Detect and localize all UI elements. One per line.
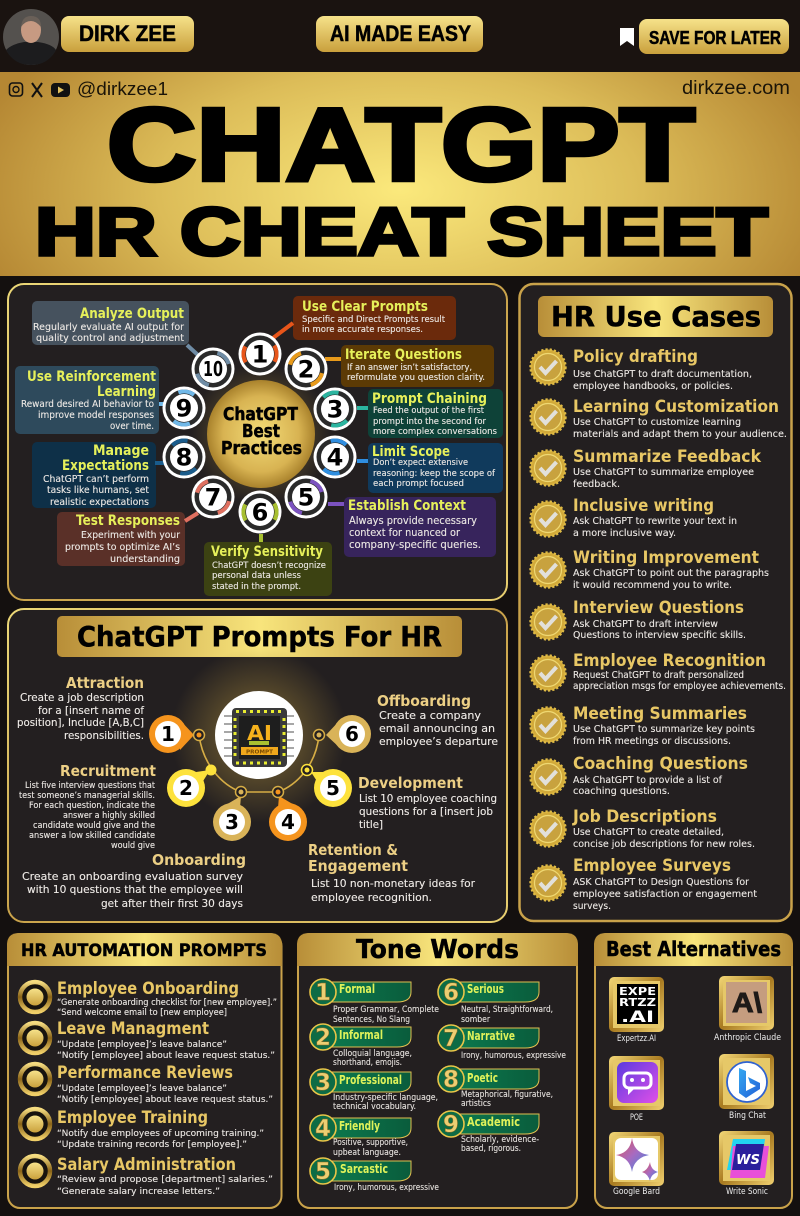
- item: leave managment: [20, 1019, 275, 1061]
- item: employee surveys: surveys.: [573, 901, 611, 912]
- item: learning customization: Use ChatGPT to customize learning: [573, 417, 741, 428]
- logo: anthropic claude: [714, 976, 781, 1043]
- item: inclusive writing: a more inclusive way.: [573, 528, 676, 539]
- social handle: @dirkzee1: [77, 79, 168, 99]
- card 6: verify sensitivity: Verify Sensitivity: [211, 544, 323, 560]
- node 9: 9: [176, 394, 192, 422]
- item: inclusive writing: Ask ChatGPT to rewrite your text in: [573, 516, 737, 527]
- item: employee training: [20, 1108, 264, 1150]
- item: learning customization: materials and adapt them to your audience.: [573, 429, 787, 440]
- panel: best alternatives: [594, 933, 793, 1208]
- header bar: [0, 0, 800, 72]
- attraction text: for a [insert name of: [38, 704, 145, 717]
- onboarding text: Create an onboarding evaluation survey: [22, 870, 243, 883]
- card 2: iterate questions: Iterate Questions: [345, 347, 462, 363]
- panel: hr automation prompts: [7, 933, 282, 1208]
- node 2: 2: [298, 356, 314, 384]
- logo: poe: POE: [630, 1113, 643, 1123]
- recruitment text: candidate would give and the: [33, 821, 155, 831]
- item: job descriptions: Job Descriptions: [572, 807, 717, 827]
- node 2: [284, 348, 328, 390]
- card 4: limit scope: [368, 443, 503, 493]
- tone 4 friendly: 4: [315, 1116, 331, 1142]
- heading: HR Use Cases: [551, 300, 761, 333]
- card 5: establish context: context for nuanced or: [349, 527, 461, 539]
- card 9: use reinforcement learning: [15, 366, 159, 434]
- heading: [297, 933, 578, 966]
- node 5: [284, 476, 328, 518]
- card 2: iterate questions: If an answer isn’t satisfactory,: [347, 363, 472, 373]
- attraction text: Attraction: [66, 674, 144, 692]
- item: interview questions: Questions to interview specific skills.: [573, 630, 746, 641]
- badge 2: [167, 764, 216, 807]
- tone 5 sarcastic: 5: [315, 1159, 331, 1185]
- card 3: prompt chaining: Feed the output of the first: [373, 406, 484, 416]
- item: employee training: Employee Training: [57, 1108, 208, 1128]
- item: learning customization: [530, 397, 787, 440]
- title banner: [0, 72, 800, 276]
- heading: HR AUTOMATION PROMPTS: [21, 941, 267, 961]
- logo: expertzz: .AI: [621, 1007, 654, 1026]
- item: employee onboarding: [20, 979, 277, 1018]
- offboarding text: employee’s departure: [379, 735, 498, 748]
- logo: bing chat: Bing Chat: [729, 1111, 767, 1121]
- item: performance reviews: “Update [employee]’s leave balance”: [57, 1084, 227, 1094]
- card 9: use reinforcement learning: Use Reinforcement: [27, 369, 156, 385]
- item: summarize feedback: Use ChatGPT to summarize employee: [573, 467, 754, 478]
- connector lines: [155, 323, 368, 542]
- attraction text: position], Include [A,B,C]: [17, 716, 144, 729]
- tone 6 serious: Serious: [467, 982, 504, 996]
- item: policy drafting: employee handbooks, or policies.: [573, 381, 733, 392]
- item: summarize feedback: [530, 447, 762, 490]
- main title: CHATGPT: [107, 87, 695, 202]
- logo: write sonic: Write Sonic: [726, 1187, 768, 1197]
- retention text: employee recognition.: [311, 891, 432, 904]
- item: job descriptions: [530, 807, 755, 850]
- hub: chatgpt best practices: Best: [242, 422, 280, 442]
- item: employee onboarding: “Send welcome email to [new employee]: [57, 1008, 227, 1018]
- item: employee onboarding: Employee Onboarding: [57, 979, 239, 999]
- card 8: manage expectations: tasks like humans, set: [47, 485, 149, 496]
- tagline button: [316, 16, 483, 52]
- hub halo: [191, 364, 331, 504]
- tone 4 friendly: upbeat language.: [333, 1148, 401, 1158]
- node 3: 3: [327, 396, 343, 424]
- subtitle: HR CHEAT SHEET: [35, 194, 768, 270]
- attraction text: responsibilities.: [64, 729, 144, 742]
- logo: expertzz: RTZZ: [619, 996, 656, 1009]
- logo: poe: [609, 1056, 664, 1123]
- item: writing improvement: Ask ChatGPT to point out the paragraphs: [573, 568, 769, 579]
- hub: chatgpt best practices: [207, 380, 315, 488]
- hub: chatgpt best practices: Practices: [221, 439, 302, 459]
- card 7: test responses: [57, 512, 185, 566]
- node 1: [238, 332, 282, 376]
- logo: expertzz: [609, 977, 664, 1044]
- badge 1: [149, 715, 204, 753]
- tone 6 serious: Neutral, Straightforward,: [461, 1005, 553, 1015]
- card 9: use reinforcement learning: over time.: [110, 421, 154, 432]
- recruitment text: [19, 762, 157, 851]
- item: meeting summaries: Meeting Summaries: [573, 704, 747, 724]
- item: performance reviews: “Notify [employee] about leave request status.”: [57, 1095, 273, 1105]
- item: leave managment: Leave Managment: [57, 1019, 209, 1039]
- card 10: analyze output: [32, 301, 189, 345]
- item: salary administration: “Generate salary increase letters.”: [57, 1187, 220, 1197]
- retention text: List 10 non-monetary ideas for: [311, 877, 475, 890]
- tone 7 narrative: Irony, humorous, expressive: [461, 1051, 566, 1061]
- item: employee recognition: Request ChatGPT to draft personalized: [573, 670, 744, 681]
- tone 1 formal: Sentences, No Slang: [333, 1015, 410, 1025]
- tone 8 poetic: [438, 1066, 553, 1109]
- card 1: use clear prompts: in more accurate responses.: [302, 325, 423, 335]
- item: employee onboarding: “Generate onboarding checklist for [new employee].”: [57, 998, 277, 1008]
- tone 3 professional: Professional: [339, 1073, 402, 1087]
- item: policy drafting: Policy drafting: [573, 347, 698, 367]
- item: leave managment: “Notify [employee] about leave request status.”: [57, 1051, 275, 1061]
- item: summarize feedback: feedback.: [573, 479, 620, 490]
- item: employee recognition: [530, 651, 786, 692]
- item: summarize feedback: Summarize Feedback: [573, 447, 762, 467]
- card 8: manage expectations: ChatGPT can’t perform: [43, 474, 149, 485]
- recruitment text: For each question, indicate the: [29, 801, 155, 811]
- card 1: use clear prompts: Use Clear Prompts: [302, 299, 428, 315]
- card 10: analyze output: Analyze Output: [80, 306, 184, 322]
- item: meeting summaries: Use ChatGPT to summarize key points: [573, 724, 755, 735]
- node 5: 5: [298, 484, 314, 512]
- node 4: [314, 436, 356, 478]
- panel: best practices: [8, 284, 507, 600]
- card 8: manage expectations: Manage: [93, 443, 149, 459]
- item: job descriptions: concise job descriptions for new roles.: [573, 839, 755, 850]
- card 3: prompt chaining: Prompt Chaining: [372, 391, 487, 407]
- card 5: establish context: Establish Context: [348, 498, 466, 514]
- card 2: iterate questions: [341, 345, 494, 387]
- card 6: verify sensitivity: ChatGPT doesn’t recognize: [212, 561, 326, 571]
- card 7: test responses: understanding: [110, 554, 180, 565]
- hub: chatgpt best practices: ChatGPT: [223, 405, 298, 425]
- onboarding text: [22, 851, 246, 910]
- card 8: manage expectations: [32, 442, 156, 508]
- badge 4: [269, 786, 307, 841]
- tone 7 narrative: Narrative: [467, 1029, 515, 1043]
- tone 1 formal: Formal: [339, 982, 375, 996]
- badge 1: 1: [161, 722, 175, 746]
- tone 2 informal: shorthand, emojis.: [333, 1058, 402, 1068]
- badge 5: 5: [326, 776, 340, 800]
- tone 6 serious: somber: [461, 1015, 490, 1025]
- item: policy drafting: Use ChatGPT to draft documentation,: [573, 369, 752, 380]
- item: inclusive writing: Inclusive writing: [573, 496, 714, 516]
- logo: anthropic claude: Anthropic Claude: [714, 1033, 781, 1043]
- tone 5 sarcastic: Sarcastic: [340, 1162, 388, 1176]
- tone 7 narrative: [438, 1025, 566, 1061]
- card 9: use reinforcement learning: Reward desired AI behavior to: [21, 399, 154, 410]
- node 4: 4: [327, 444, 343, 472]
- item: coaching questions: Coaching Questions: [573, 754, 748, 774]
- card 3: prompt chaining: prompt into the second for: [373, 417, 486, 427]
- attraction text: Create a job description: [20, 691, 144, 704]
- tone 1 formal: 1: [315, 980, 331, 1006]
- node 3: [312, 386, 358, 432]
- tone 1 formal: Proper Grammar, Complete: [333, 1005, 439, 1015]
- item: performance reviews: Performance Reviews: [57, 1063, 233, 1083]
- item: coaching questions: Ask ChatGPT to provide a list of: [573, 775, 722, 786]
- development text: questions for a [insert job: [359, 805, 493, 818]
- card 5: establish context: Always provide necessary: [349, 515, 477, 527]
- tone 8 poetic: artistics: [461, 1099, 492, 1109]
- onboarding text: with 10 questions that the employee will: [27, 883, 243, 896]
- logo: google bard: [609, 1132, 664, 1197]
- tone 3 professional: technical vocabulary.: [333, 1102, 416, 1112]
- recruitment text: would give: [111, 841, 155, 851]
- item: writing improvement: Writing Improvement: [573, 548, 759, 568]
- tone 3 professional: Industry-specific language,: [333, 1093, 438, 1103]
- panel: tone words: [297, 933, 578, 1208]
- item: writing improvement: [530, 548, 769, 591]
- item: performance reviews: [20, 1063, 273, 1105]
- tone 2 informal: Informal: [339, 1028, 383, 1042]
- node 6: 6: [252, 498, 268, 526]
- card 6: verify sensitivity: personal data unless: [212, 571, 301, 581]
- offboarding text: email announcing an: [379, 722, 495, 735]
- tone 4 friendly: Friendly: [339, 1119, 380, 1133]
- item: salary administration: Salary Administration: [57, 1155, 236, 1175]
- tone 9 academic: Scholarly, evidence-: [461, 1135, 539, 1145]
- tone 3 professional: 3: [315, 1070, 331, 1096]
- name button: DIRK ZEE: [79, 21, 176, 46]
- tone 4 friendly: Positive, supportive,: [333, 1138, 408, 1148]
- item: learning customization: Learning Customization: [573, 397, 779, 417]
- badge 2: 2: [179, 776, 193, 800]
- tone 8 poetic: 8: [443, 1067, 459, 1093]
- social icons: [10, 83, 70, 97]
- heading: [7, 933, 282, 966]
- tone 8 poetic: Poetic: [467, 1071, 498, 1085]
- logo: anthropic claude: A\: [732, 987, 762, 1018]
- tone 2 informal: [310, 1024, 412, 1068]
- icon: bookmark: [620, 28, 634, 46]
- node 9: [162, 386, 206, 430]
- node 8: [161, 434, 207, 480]
- badge 6: [314, 715, 371, 753]
- onboarding text: get after their first 30 days: [101, 897, 243, 910]
- card 4: limit scope: Don’t expect extensive: [373, 458, 468, 468]
- retention text: Retention &: [308, 841, 398, 859]
- node 10: 10: [203, 357, 223, 381]
- card 8: manage expectations: realistic expectations: [50, 497, 149, 508]
- node 6: [238, 490, 282, 534]
- item: meeting summaries: [530, 704, 755, 747]
- tone 7 narrative: 7: [443, 1026, 459, 1052]
- tone 2 informal: Colloquial language,: [333, 1049, 412, 1059]
- badge 3: [213, 786, 251, 841]
- heading: ChatGPT Prompts For HR: [77, 620, 442, 653]
- item: salary administration: “Review and propose [department] salaries.”: [57, 1175, 273, 1185]
- item: employee training: “Notify due employees of upcoming training.”: [57, 1129, 264, 1139]
- item: leave managment: “Update [employee]’s leave balance”: [57, 1040, 227, 1050]
- tone 6 serious: 6: [443, 980, 459, 1006]
- development text: title]: [359, 818, 383, 831]
- avatar photo: [3, 9, 59, 65]
- connector arc: [199, 735, 319, 792]
- logo: bing chat: [719, 1054, 774, 1121]
- heading: Best Alternatives: [606, 937, 781, 961]
- item: interview questions: Interview Questions: [573, 598, 744, 618]
- card 4: limit scope: Limit Scope: [372, 444, 450, 460]
- logo: google bard: Google Bard: [613, 1187, 660, 1197]
- tone 9 academic: Academic: [467, 1115, 520, 1129]
- heading: [594, 933, 793, 966]
- card 6: verify sensitivity: stated in the prompt.: [212, 582, 301, 592]
- card 7: test responses: prompts to optimize AI’s: [65, 542, 180, 553]
- badge 4: 4: [281, 810, 295, 834]
- card 1: use clear prompts: [293, 296, 456, 340]
- development text: [358, 774, 497, 831]
- card 4: limit scope: reasoning: keep the scope of: [373, 469, 496, 479]
- card 9: use reinforcement learning: improve model responses: [38, 410, 154, 421]
- recruitment text: List five interview questions that: [25, 781, 155, 791]
- badge 3: 3: [225, 810, 239, 834]
- onboarding text: Onboarding: [152, 851, 246, 869]
- logo: expertzz: Expertzz.AI: [617, 1034, 656, 1044]
- item: salary administration: [20, 1155, 273, 1197]
- panel: hr use cases: [520, 284, 792, 921]
- recruitment text: answer a low skilled candidate: [29, 831, 155, 841]
- node 10: [192, 348, 234, 390]
- recruitment text: Recruitment: [60, 762, 157, 780]
- save button: SAVE FOR LATER: [649, 28, 781, 48]
- item: employee surveys: Employee Surveys: [573, 856, 731, 876]
- recruitment text: test someone’s managerial skills.: [19, 791, 155, 801]
- node 8: 8: [176, 444, 192, 472]
- panel: prompts for hr: [8, 609, 507, 922]
- tone 4 friendly: [310, 1115, 411, 1158]
- card 10: analyze output: quality control and adjustment: [36, 333, 184, 344]
- icon: ai chip: PROMPT: [246, 750, 273, 756]
- retention text: [308, 841, 475, 904]
- item: policy drafting: [530, 347, 752, 392]
- logo: write sonic: [719, 1131, 774, 1197]
- item: employee training: “Update training records for [employee].”: [57, 1140, 247, 1150]
- card 5: establish context: [344, 497, 496, 557]
- tone 3 professional: [310, 1069, 438, 1112]
- offboarding text: Offboarding: [377, 692, 471, 710]
- card 7: test responses: Test Responses: [76, 513, 180, 529]
- item: job descriptions: Use ChatGPT to create detailed,: [573, 827, 724, 838]
- item: coaching questions: [530, 754, 748, 797]
- tone 2 informal: 2: [315, 1025, 331, 1051]
- card 2: iterate questions: reformulate you question clarity.: [347, 373, 485, 383]
- tone 8 poetic: Metaphorical, figurative,: [461, 1090, 553, 1100]
- tone 5 sarcastic: Irony, humorous, expressive: [334, 1183, 439, 1193]
- item: interview questions: [530, 598, 746, 641]
- tone 9 academic: based, rigorous.: [461, 1144, 521, 1154]
- node 7: [192, 476, 234, 518]
- badge 5: [302, 764, 352, 807]
- development text: List 10 employee coaching: [359, 792, 497, 805]
- website: dirkzee.com: [682, 78, 790, 99]
- recruitment text: answer a highly skilled: [63, 811, 155, 821]
- card 8: manage expectations: Expectations: [62, 458, 149, 474]
- logo: write sonic: WS: [736, 1153, 760, 1168]
- heading: Tone Words: [356, 935, 519, 965]
- card 4: limit scope: each prompt focused: [373, 479, 464, 489]
- tone 6 serious: [438, 979, 553, 1025]
- card 3: prompt chaining: more complex conversations: [373, 427, 497, 437]
- item: employee surveys: [530, 856, 757, 912]
- card 7: test responses: Experiment with your: [81, 530, 181, 541]
- offboarding text: [377, 692, 498, 748]
- item: inclusive writing: [530, 496, 737, 539]
- item: coaching questions: coaching questions.: [573, 786, 670, 797]
- item: interview questions: Ask ChatGPT to draft interview: [573, 619, 718, 630]
- tone 9 academic: [438, 1111, 539, 1154]
- icon: ai chip: [215, 691, 303, 779]
- logo: expertzz: EXPE: [619, 985, 656, 998]
- chip halo: [171, 647, 347, 823]
- tone 1 formal: [310, 979, 439, 1025]
- offboarding text: Create a company: [379, 709, 481, 722]
- card 3: prompt chaining: [368, 389, 503, 438]
- card 6: verify sensitivity: [204, 542, 332, 596]
- attraction text: [17, 674, 145, 742]
- node 1: 1: [252, 340, 268, 368]
- tone 9 academic: 9: [443, 1112, 459, 1138]
- development text: Development: [358, 774, 464, 792]
- item: meeting summaries: from HR meetings or discussions.: [573, 736, 731, 747]
- item: employee recognition: Employee Recognition: [573, 651, 766, 671]
- retention text: Engagement: [308, 857, 409, 875]
- node 7: 7: [205, 484, 221, 512]
- card 1: use clear prompts: Specific and Direct Prompts result: [302, 315, 445, 325]
- item: writing improvement: it would recommend you to write.: [573, 580, 732, 591]
- card 9: use reinforcement learning: Learning: [97, 384, 156, 400]
- tone 5 sarcastic: [310, 1158, 439, 1193]
- name button: [61, 16, 194, 52]
- icon: ai chip: AI: [247, 721, 272, 745]
- tagline button: AI MADE EASY: [330, 21, 471, 46]
- card 5: establish context: company-specific queries.: [349, 539, 481, 551]
- item: employee surveys: ASK ChatGPT to Design Questions for: [573, 877, 750, 888]
- badge 6: 6: [345, 722, 359, 746]
- item: employee surveys: employee satisfaction or engagement: [573, 889, 757, 900]
- save button: [639, 19, 789, 54]
- card 10: analyze output: Regularly evaluate AI output for: [33, 322, 185, 333]
